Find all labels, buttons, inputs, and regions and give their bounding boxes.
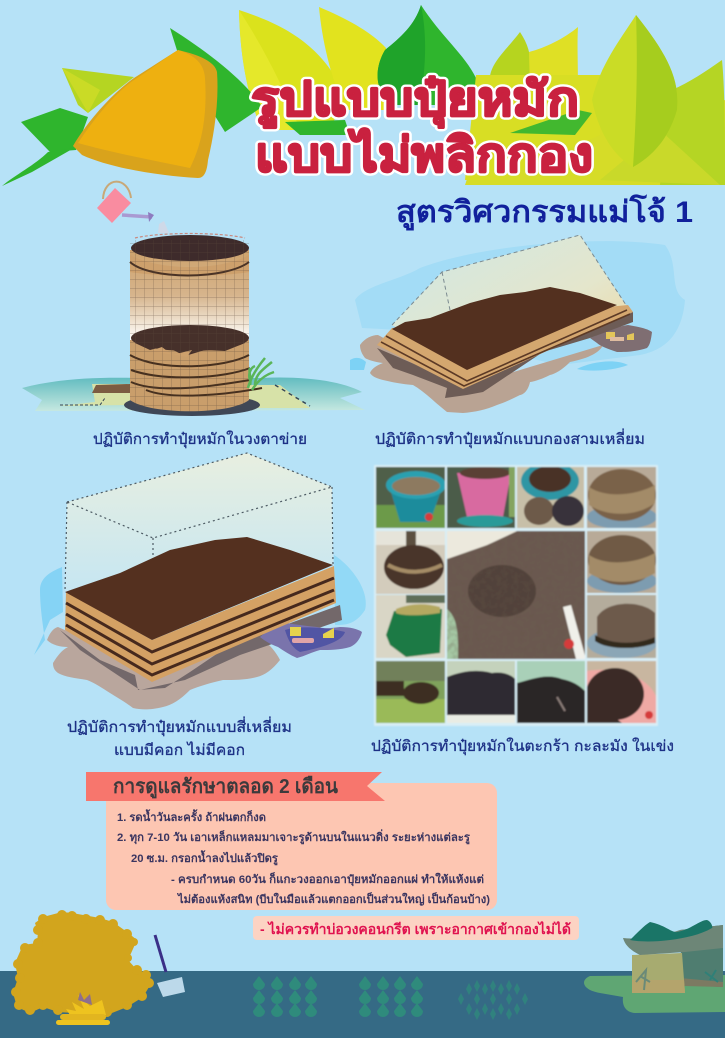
callout: warning: - ไม่ควรทำบ่อวงคอนกรีต เพราะอากาศเข้ากองไม่ได้ bbox=[260, 920, 571, 937]
caption: triangular pile: ปฏิบัติการทำปุ๋ยหมักแบบกองสามเหลี่ยม bbox=[375, 428, 645, 449]
icon: golden shrub with flame bbox=[11, 910, 154, 1025]
illustration: rectangular compost pile bbox=[34, 453, 366, 709]
seedling bed 1 bbox=[253, 976, 317, 1017]
seedlings bbox=[253, 976, 528, 1020]
photo 11: dark compost bbox=[446, 660, 516, 723]
ribbon heading bbox=[86, 772, 385, 801]
ribbon heading: การดูแลรักษาตลอด 2 เดือน bbox=[113, 775, 338, 800]
illustration: triangular compost pile bbox=[350, 235, 685, 413]
maintenance steps: - ครบกำหนด 60วัน ก็แกะวงออกเอาปุ๋ยหมักออกแผ่ ทำให้แห้งแต่ bbox=[171, 872, 484, 887]
photo 4: layered heap bbox=[586, 466, 657, 529]
maintenance steps: 2. ทุก 7-10 วัน เอาเหล็กแหลมมาเจาะรูด้านบนในแนวดิ่ง ระยะห่างแต่ละรู bbox=[117, 829, 470, 845]
photo 12: dark compost with worms bbox=[516, 660, 586, 724]
photo 7: large compost close-up bbox=[446, 530, 586, 660]
caption: baskets: ปฏิบัติการทำปุ๋ยหมักในตะกร้า กะละมัง ในเข่ง bbox=[371, 737, 674, 756]
icon: golden compost heap bbox=[73, 50, 218, 178]
maintenance steps: 20 ซ.ม. กรอกน้ำลงไปแล้วปิดรู bbox=[131, 850, 278, 866]
icon: compost sacks on grass bbox=[584, 920, 725, 1013]
photo 6: green mesh bag bbox=[376, 594, 446, 658]
seedling bed 3 bbox=[458, 980, 528, 1020]
callout: warning bbox=[253, 916, 579, 940]
icon: shovel bbox=[155, 935, 185, 997]
title: รูปแบบปุ๋ยหมัก bbox=[251, 72, 579, 129]
caption: rectangular pile: แบบมีคอก ไม่มีคอก bbox=[114, 741, 245, 759]
photo collage bbox=[374, 462, 658, 726]
illustration: mesh cylinder compost bbox=[22, 221, 365, 416]
seedling bed 2 bbox=[359, 976, 423, 1017]
photo 8: layered heap bbox=[586, 530, 657, 594]
caption: rectangular pile: ปฏิบัติการทำปุ๋ยหมักแบบสี่เหลี่ยม bbox=[67, 716, 292, 737]
photo 2: pink basket bbox=[446, 466, 516, 529]
title: แบบไม่พลิกกอง bbox=[255, 127, 593, 181]
caption: rectangular pile bbox=[67, 716, 292, 759]
caption: mesh cylinder: ปฏิบัติการทำปุ๋ยหมักในวงตาข่าย bbox=[93, 430, 307, 449]
maintenance steps: 1. รดน้ำวันละครั้ง ถ้าฝนตกก็งด bbox=[117, 809, 266, 824]
photo 1: blue basin bbox=[375, 466, 446, 529]
title bbox=[251, 72, 593, 181]
icon: watering can bbox=[97, 182, 154, 223]
photo 10: compost rings on lawn bbox=[375, 660, 446, 724]
title: แบบไม่พลิกกอง bbox=[255, 127, 593, 181]
maintenance steps: ไม่ต้องแห้งสนิท (บีบในมือแล้วแตกออกเป็นส่วนใหญ่ เป็นก้อนบ้าง) bbox=[176, 892, 490, 906]
photo 3: basins bbox=[516, 466, 585, 529]
photo 5: dark heap outdoors bbox=[376, 530, 446, 595]
title: รูปแบบปุ๋ยหมัก bbox=[251, 72, 579, 129]
photo 9: decomposed heap bbox=[586, 594, 657, 659]
header leaf banner bbox=[2, 5, 725, 186]
ground band bbox=[0, 971, 725, 1038]
subtitle: สูตรวิศวกรรมแม่โจ้ 1 bbox=[396, 193, 693, 231]
maintenance steps bbox=[117, 809, 490, 906]
photo 13: compost in hand bbox=[586, 660, 657, 724]
panel: maintenance bbox=[86, 772, 497, 910]
